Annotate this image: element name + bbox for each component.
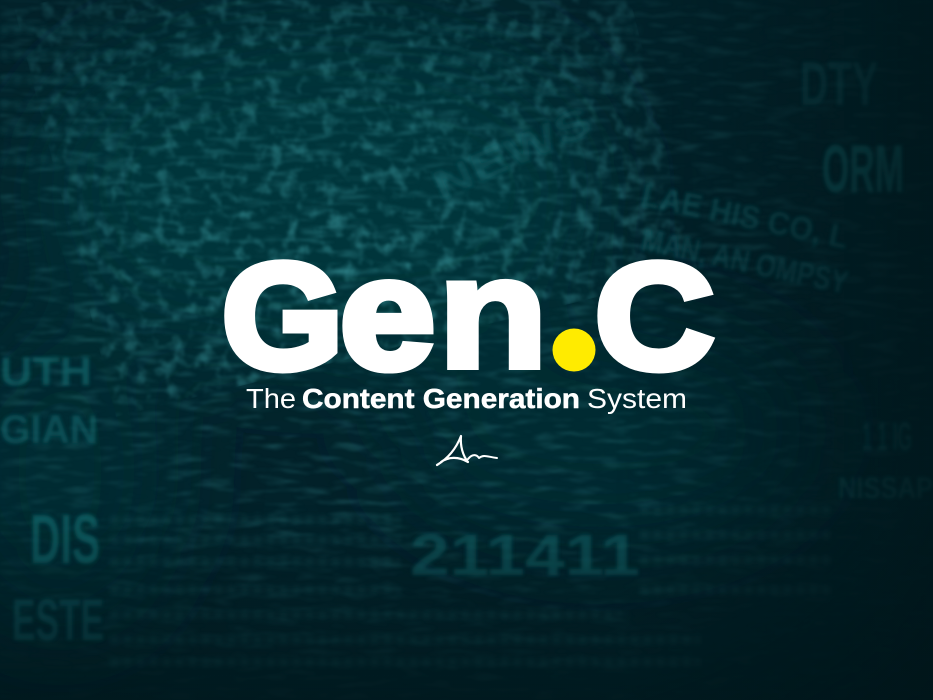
ghost newspaper lettering: MAN, AN OMPSY <box>639 222 851 301</box>
letter e: e <box>340 226 435 402</box>
letter n: n <box>438 225 548 401</box>
letter C: C <box>595 232 714 400</box>
ghost newspaper lettering: DTY <box>800 50 878 119</box>
tagline: System <box>587 383 687 414</box>
tagline <box>246 383 687 414</box>
ghost newspaper lettering: ESTE <box>12 588 104 653</box>
tagline: Content Generation <box>302 383 580 414</box>
tagline: The <box>246 383 296 414</box>
logo: Gen.C <box>222 225 714 402</box>
letter G: G <box>222 232 343 400</box>
ghost newspaper lettering: NEWS <box>426 99 599 208</box>
logo dot: yellow <box>552 328 596 372</box>
ghost newspaper lettering: DIS <box>30 500 100 578</box>
ghost newspaper lettering: 211411 <box>410 523 640 588</box>
ghost newspaper lettering: LAE HIS CO, L <box>639 177 851 256</box>
ghost newspaper lettering: UTH <box>0 350 92 394</box>
signature mark <box>437 436 497 465</box>
ghost newspaper lettering: GIAN <box>0 408 98 452</box>
